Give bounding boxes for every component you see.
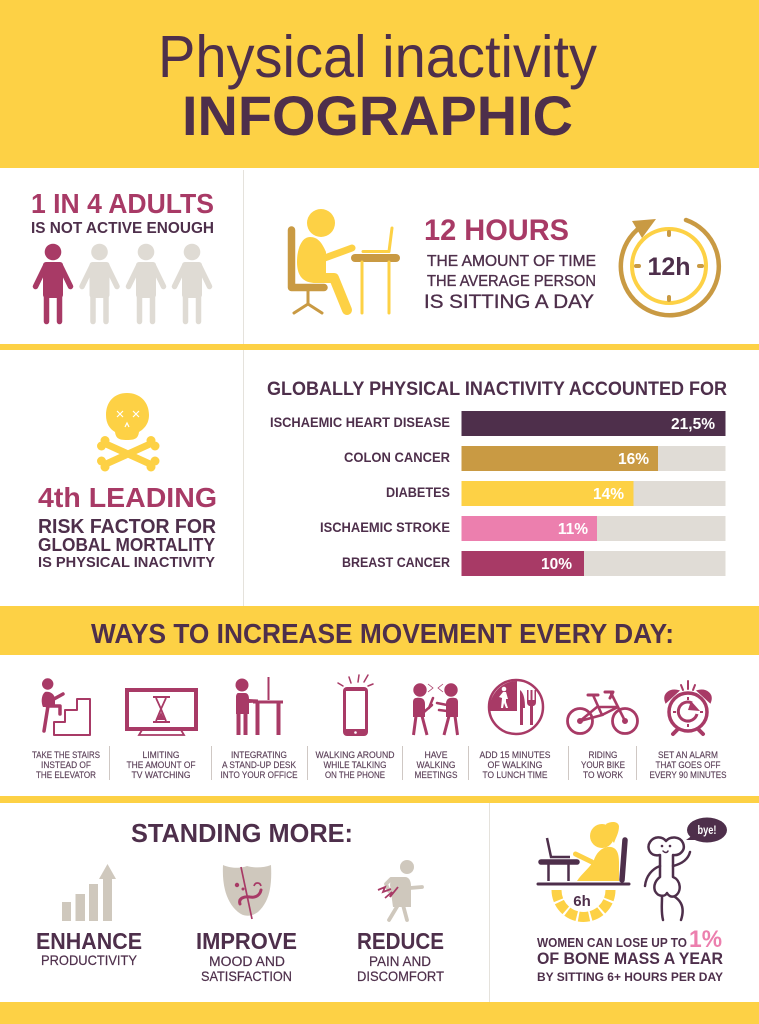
icon: two people talking xyxy=(413,683,458,735)
stat description: THE AMOUNT OF TIME xyxy=(427,253,596,270)
section heading band: ways to increase movement: WAYS TO INCREASE MOVEMENT EVERY DAY: xyxy=(91,618,674,649)
bar: ischaemic heart disease: ISCHAEMIC HEART DISEASE xyxy=(270,415,450,430)
tip: walk at lunch xyxy=(480,680,550,781)
icon: TV with hourglass xyxy=(127,690,196,735)
stat heading: 12 HOURS xyxy=(424,214,569,247)
benefit: improve mood: MOOD AND xyxy=(209,953,285,969)
tip: alarm every 90 minutes xyxy=(650,681,726,781)
caption xyxy=(316,750,395,781)
caption: YOUR BIKE xyxy=(581,760,625,771)
caption xyxy=(220,750,298,781)
bar: ischaemic stroke xyxy=(320,516,726,541)
panel: standing more xyxy=(36,818,444,984)
benefit: reduce pain: PAIN AND xyxy=(369,953,431,969)
bar: colon cancer: 16% xyxy=(618,451,649,468)
tip: take the stairs xyxy=(32,678,100,781)
icon: active person xyxy=(36,244,70,322)
icon: bicycle xyxy=(568,692,638,734)
section heading: STANDING MORE: xyxy=(131,818,353,848)
bone mass text xyxy=(537,926,723,984)
stat description xyxy=(38,516,217,571)
caption: THAT GOES OFF xyxy=(656,760,721,771)
caption: EVERY 90 MINUTES xyxy=(650,770,726,781)
caption xyxy=(650,750,726,781)
bone mass text: WOMEN CAN LOSE UP TO xyxy=(537,936,687,950)
bar: ischaemic heart disease xyxy=(270,411,726,436)
icon: rising bars with arrow xyxy=(62,864,116,921)
icon: waving bone xyxy=(645,837,690,920)
panel: 4th leading risk factor xyxy=(38,393,217,571)
caption: THE ELEVATOR xyxy=(36,770,96,781)
icon: skull and crossbones xyxy=(97,393,160,472)
caption xyxy=(32,750,100,781)
caption xyxy=(581,750,625,781)
benefit: enhance productivity xyxy=(36,864,142,968)
caption: RIDING xyxy=(588,750,618,761)
benefit: improve mood xyxy=(196,865,297,984)
icon: plate with walker and cutlery xyxy=(489,680,543,734)
stat description xyxy=(424,253,596,313)
caption: INTEGRATING xyxy=(231,750,287,761)
caption: ADD 15 MINUTES xyxy=(480,750,550,761)
bar: diabetes: DIABETES xyxy=(386,485,450,500)
bar: ischaemic heart disease: 21,5% xyxy=(671,416,715,433)
bar: diabetes: 14% xyxy=(593,486,624,503)
caption: OF WALKING xyxy=(488,760,542,771)
benefit text: ENHANCE xyxy=(36,928,142,954)
benefit: improve mood: SATISFACTION xyxy=(201,968,292,984)
stat description: IS SITTING A DAY xyxy=(424,292,594,313)
panel: 12 hours sitting xyxy=(292,209,719,315)
caption: MEETINGS xyxy=(414,770,458,781)
title line 2: INFOGRAPHIC xyxy=(182,84,573,147)
icon: person at standing desk xyxy=(236,677,283,735)
benefit text: IMPROVE xyxy=(196,928,297,954)
caption: TAKE THE STAIRS xyxy=(32,750,100,761)
caption: TV WATCHING xyxy=(132,770,190,781)
benefit: enhance productivity: PRODUCTIVITY xyxy=(41,952,138,968)
bar: ischaemic stroke: 11% xyxy=(558,521,588,538)
caption: INSTEAD OF xyxy=(41,760,91,771)
caption xyxy=(414,750,458,781)
caption: HAVE xyxy=(424,750,448,761)
bar: ischaemic stroke: ISCHAEMIC STROKE xyxy=(320,520,450,535)
icon: comedy tragedy mask xyxy=(223,865,271,919)
caption: TO LUNCH TIME xyxy=(482,770,548,781)
speech bubble: bye xyxy=(686,818,727,842)
stat description: THE AVERAGE PERSON xyxy=(427,273,596,290)
bone mass text: OF BONE MASS A YEAR xyxy=(537,949,723,968)
caption: WHILE TALKING xyxy=(324,760,386,771)
caption: ON THE PHONE xyxy=(325,770,385,781)
caption: A STAND-UP DESK xyxy=(222,760,297,771)
stat description: IS PHYSICAL INACTIVITY xyxy=(38,554,215,571)
icon: person with back pain xyxy=(378,860,422,920)
bar: colon cancer xyxy=(344,446,726,471)
bar: breast cancer xyxy=(342,551,726,576)
benefit text: REDUCE xyxy=(357,928,444,954)
icon: 12h clock xyxy=(621,219,719,315)
stat heading: 1 IN 4 ADULTS xyxy=(31,188,214,219)
icon: inactive person 2 xyxy=(82,244,117,322)
bone mass text: 1% xyxy=(689,926,722,953)
stat description: GLOBAL MORTALITY xyxy=(38,535,215,555)
benefit: reduce pain: DISCOMFORT xyxy=(357,968,444,984)
tip: stand-up desk xyxy=(220,677,298,781)
icon: phone xyxy=(338,675,373,736)
caption xyxy=(480,750,550,781)
section heading band: ways to increase movement xyxy=(0,606,759,655)
benefit: reduce pain xyxy=(357,860,444,984)
tip: walking on the phone xyxy=(316,675,395,781)
bar: diabetes xyxy=(386,481,726,506)
icon: inactive person 4 xyxy=(174,244,210,322)
title line 1: Physical inactivity xyxy=(158,24,597,90)
panel: 1 in 4 adults xyxy=(31,188,214,322)
bar: breast cancer: 10% xyxy=(541,556,572,573)
caption: TO WORK xyxy=(583,770,624,781)
header band xyxy=(0,0,759,168)
icon: woman at desk with timer: 6h xyxy=(573,893,591,910)
caption: INTO YOUR OFFICE xyxy=(220,770,298,781)
icon: 12h clock: 12h xyxy=(647,253,691,281)
bar: colon cancer: COLON CANCER xyxy=(344,450,450,465)
tip: walking meetings xyxy=(413,683,458,781)
speech bubble: bye: bye! xyxy=(698,823,716,837)
panel: bone mass xyxy=(537,818,727,984)
tip: limit TV xyxy=(126,690,196,781)
caption: WALKING xyxy=(416,760,456,771)
tip: riding bike xyxy=(568,692,638,781)
caption: WALKING AROUND xyxy=(316,750,395,761)
icon: inactive person 3 xyxy=(128,244,164,322)
icon: alarm clock xyxy=(665,681,711,734)
bar: breast cancer: BREAST CANCER xyxy=(342,555,450,570)
caption: SET AN ALARM xyxy=(658,750,718,761)
stat description: RISK FACTOR FOR xyxy=(38,516,217,538)
icon: woman at desk with timer xyxy=(538,822,629,917)
caption: LIMITING xyxy=(142,750,180,761)
bone mass text: BY SITTING 6+ HOURS PER DAY xyxy=(537,970,723,984)
caption: THE AMOUNT OF xyxy=(126,760,196,771)
stat heading: 4th LEADING xyxy=(38,482,217,513)
icon: seated person at desk xyxy=(292,209,396,313)
icon: person on stairs xyxy=(42,678,90,735)
chart heading: GLOBALLY PHYSICAL INACTIVITY ACCOUNTED FOR xyxy=(267,379,727,400)
caption xyxy=(126,750,196,781)
stat subheading: IS NOT ACTIVE ENOUGH xyxy=(31,220,214,237)
panel: bar chart of diseases xyxy=(267,379,727,576)
